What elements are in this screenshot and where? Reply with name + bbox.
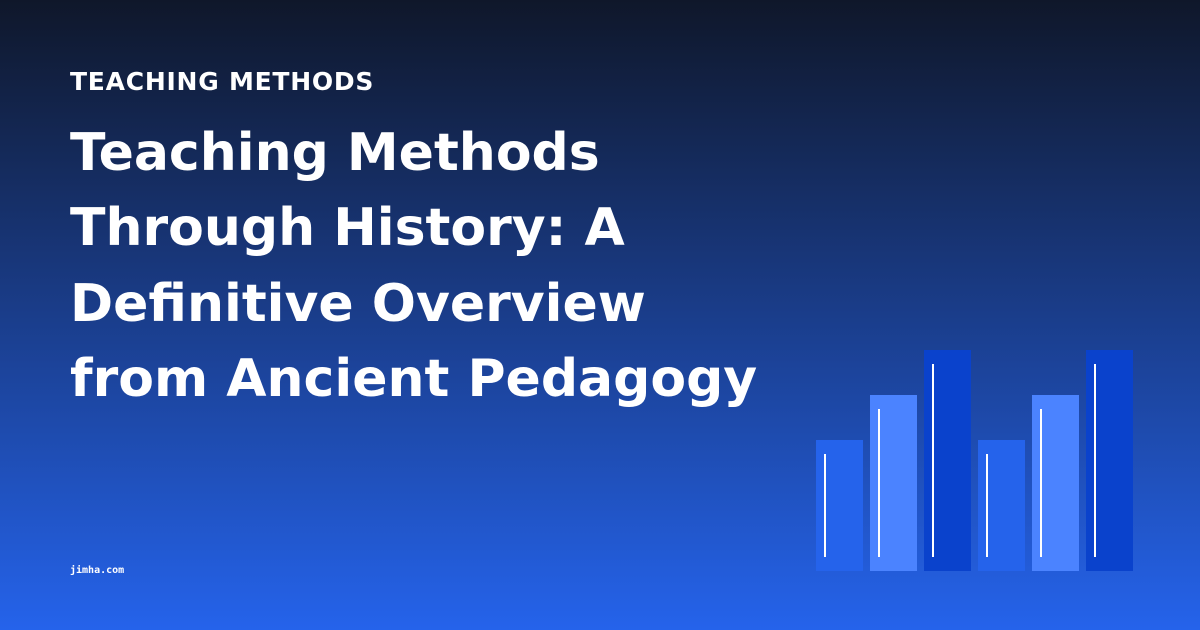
title: Teaching Methods <box>70 123 600 183</box>
bar 5 <box>1032 395 1079 571</box>
bar 3 <box>924 350 971 571</box>
bar 4 <box>978 440 1025 571</box>
title <box>70 123 757 409</box>
bar 6 <box>1086 350 1133 571</box>
title: Definitive Overview <box>70 274 646 334</box>
footer site name: jimha.com <box>70 565 124 576</box>
bar 1 <box>816 440 863 571</box>
title: from Ancient Pedagogy <box>70 349 757 409</box>
title: Through History: A <box>70 198 625 258</box>
eyebrow label: TEACHING METHODS <box>70 67 374 96</box>
bar 2 <box>870 395 917 571</box>
